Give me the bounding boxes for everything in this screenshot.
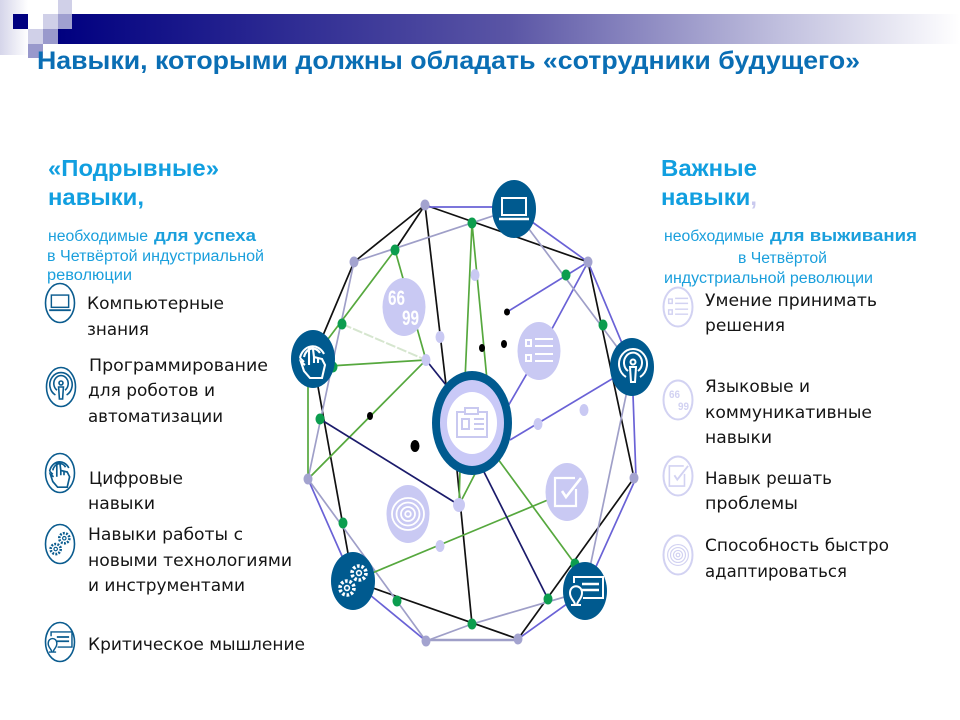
- skill: critical thinking: [46, 622, 305, 662]
- icon: quotes node: 66: [388, 287, 405, 310]
- skill: robot programming: автоматизации: [88, 407, 223, 426]
- skill: robot programming: для роботов и: [88, 381, 215, 400]
- network nodes: pale lavender: [422, 269, 588, 552]
- skill: fast adaptation: [664, 536, 889, 581]
- text block: important skills description: необходимые: [664, 228, 764, 245]
- icon: list node: [518, 322, 560, 380]
- network nodes: black dots: [367, 308, 510, 452]
- skill: computer knowledge: [46, 284, 224, 339]
- heading: disruptive skills: [48, 155, 219, 210]
- network lines: [308, 205, 636, 641]
- skill: computer knowledge: Компьютерные: [87, 294, 224, 313]
- skill: digital skills: Цифровые: [89, 469, 183, 488]
- text block: disruptive skills description: революции: [47, 267, 132, 284]
- icon: critical thinking node: [563, 562, 607, 620]
- skill: problem solving: проблемы: [705, 494, 798, 513]
- icon: podcast node: [610, 338, 654, 396]
- skill: digital skills: навыки: [88, 494, 155, 513]
- skill: robot programming: [46, 356, 268, 426]
- text block: important skills description: индустриальной революции: [664, 270, 873, 287]
- skill: fast adaptation: Способность быстро: [705, 536, 889, 555]
- network nodes: slate lavender: [304, 200, 638, 646]
- skill: decision making: Умение принимать: [705, 291, 877, 310]
- icon: checkbox node: [546, 463, 588, 521]
- text block: disruptive skills description: [47, 226, 264, 284]
- heading: important skills: [661, 155, 757, 210]
- icon: laptop node: [492, 180, 536, 238]
- skill: computer knowledge: знания: [87, 320, 149, 339]
- title: Навыки, которыми должны обладать «сотрудники будущего»: [37, 47, 860, 75]
- skill: new technologies: новыми технологиями: [88, 551, 292, 570]
- skill: language and communication: коммуникативные: [705, 403, 872, 422]
- text block: important skills description: для выживания: [770, 226, 917, 245]
- skill: decision making: [664, 288, 877, 335]
- skill: critical thinking: Критическое мышление: [88, 635, 305, 654]
- text block: important skills description: в Четвёртой: [738, 250, 827, 267]
- skill: language and communication: 99: [678, 401, 689, 413]
- skill: fast adaptation: адаптироваться: [705, 562, 847, 581]
- heading: disruptive skills: навыки,: [48, 184, 144, 210]
- skill: new technologies: Навыки работы с: [88, 525, 243, 544]
- skill: problem solving: [664, 456, 832, 513]
- skill: new technologies: [46, 524, 292, 595]
- icon: center clipboard: [432, 371, 512, 475]
- skill: language and communication: навыки: [705, 428, 772, 447]
- icon: gears node: [331, 552, 375, 610]
- icon: target node: [386, 485, 430, 543]
- skill: decision making: решения: [705, 316, 785, 335]
- skill: robot programming: Программирование: [89, 356, 268, 375]
- icon: quotes node: 99: [402, 307, 419, 330]
- heading: disruptive skills: «Подрывные»: [48, 155, 219, 181]
- network diagram: [291, 180, 654, 646]
- text block: disruptive skills description: необходимые: [48, 228, 148, 245]
- heading: important skills: Важные: [661, 155, 757, 181]
- heading: important skills: навыки,: [661, 184, 757, 210]
- skill: new technologies: и инструментами: [88, 576, 245, 595]
- skill: language and communication: Языковые и: [705, 377, 810, 396]
- text block: disruptive skills description: в Четвёртой индустриальной: [47, 248, 264, 265]
- icon: hand node: [291, 330, 335, 388]
- skill: language and communication: 66: [669, 389, 680, 401]
- text block: disruptive skills description: для успеха: [154, 226, 257, 245]
- network nodes: green: [316, 218, 608, 630]
- skill: digital skills: [46, 454, 183, 513]
- skill: language and communication: [664, 377, 872, 447]
- skill: problem solving: Навык решать: [705, 469, 832, 488]
- icon: quotes node: [382, 278, 426, 336]
- text block: important skills description: [664, 226, 917, 287]
- header decoration: [0, 0, 960, 58]
